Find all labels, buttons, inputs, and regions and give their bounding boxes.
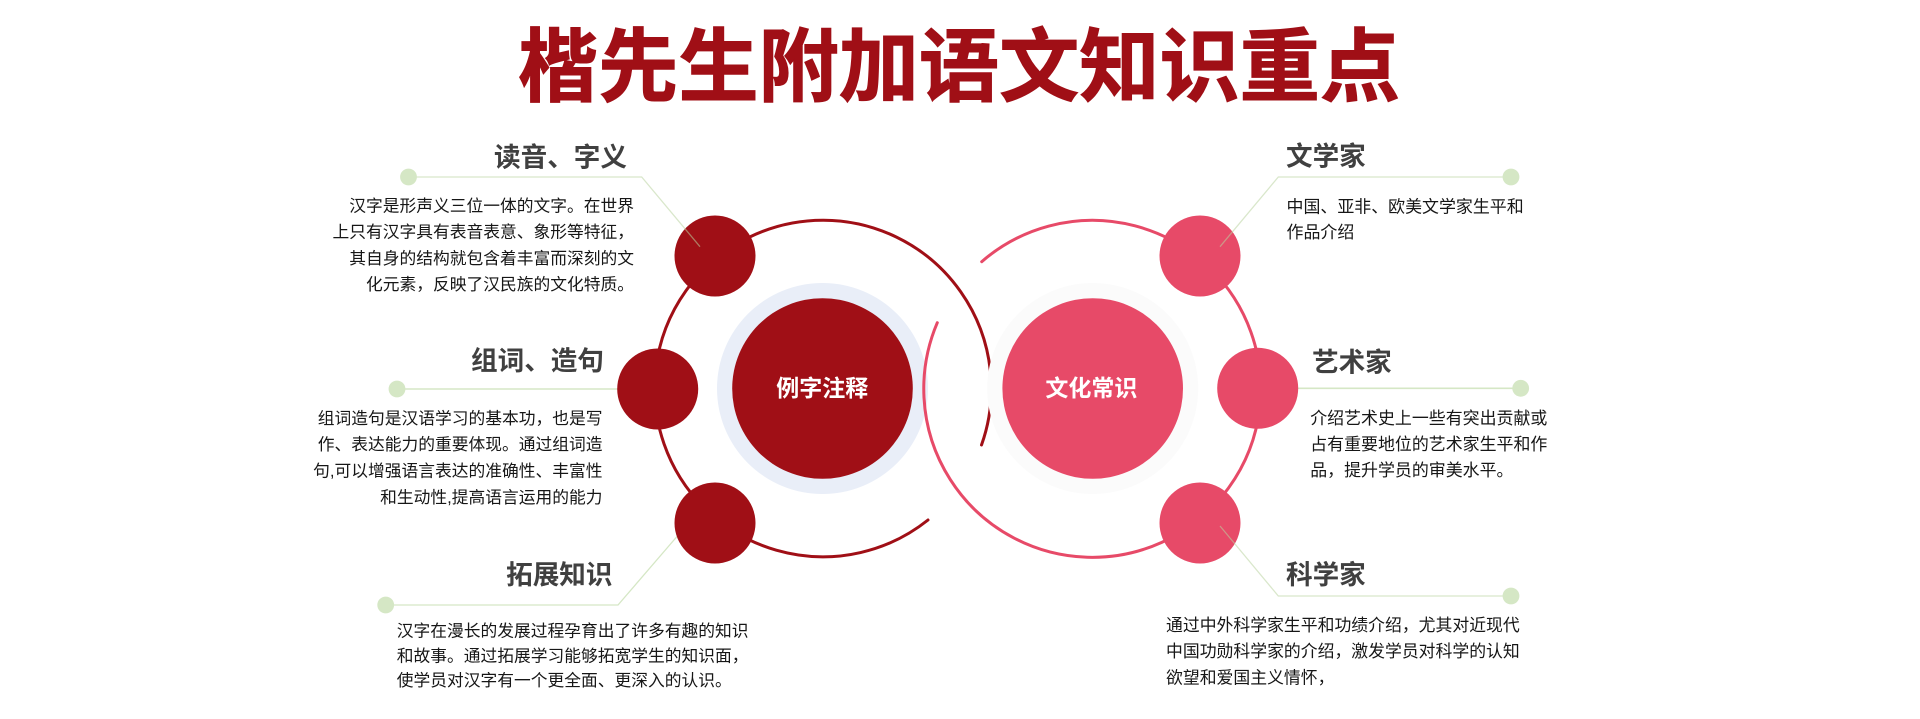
diagram: right ring group: [924, 216, 1521, 564]
text: 组词、造句: 和生动性,提高语言运用的能力: [380, 488, 602, 507]
text: 拓展知识: [397, 622, 748, 690]
text: 文学家: [1286, 198, 1524, 242]
text: 科学家: [1166, 616, 1520, 688]
text: 科学家: 欲望和爱国主义情怀，: [1166, 668, 1334, 688]
heading: 读音、字义: 读音、字义: [494, 142, 627, 172]
connector: 读音、字义: [408, 177, 700, 247]
text: 科学家: 通过中外科学家生平和功绩介绍，尤其对近现代: [1166, 616, 1520, 635]
arc: right ring: [924, 220, 1261, 557]
text: 文学家: 中国、亚非、欧美文学家生平和: [1286, 198, 1524, 216]
node: 艺术家: [1217, 348, 1298, 429]
dot: 读音、字义: [400, 169, 417, 185]
connector: 科学家: [1220, 526, 1511, 596]
node: 组词、造句: [617, 348, 698, 430]
node: 拓展知识: [674, 482, 756, 564]
arc: left ring: [655, 220, 991, 557]
text: 读音、字义: 上只有汉字具有表音表意、象形等特征，: [332, 222, 634, 242]
text: 组词、造句: 句,可以增强语言表达的准确性、丰富性: [313, 462, 602, 480]
dot: 组词、造句: [389, 381, 405, 397]
text: 艺术家: [1310, 409, 1547, 480]
halo: left centre: [717, 283, 928, 494]
heading: 文学家: 文学家: [1286, 142, 1366, 172]
text: 读音、字义: 其自身的结构就包含着丰富而深刻的文: [349, 249, 634, 268]
dot: 拓展知识: [377, 597, 394, 613]
node: 读音、字义: [674, 216, 756, 296]
heading: 科学家: 科学家: [1286, 560, 1366, 590]
connector: 拓展知识: [386, 533, 680, 605]
text: 组词、造句: [313, 409, 603, 507]
text: 文学家: 作品介绍: [1286, 223, 1354, 242]
node: 文学家: [1160, 216, 1240, 296]
label: 文化常识: 文化常识: [1045, 375, 1137, 401]
text: 组词、造句: 组词造句是汉语学习的基本功，也是写: [318, 409, 602, 428]
heading: 拓展知识: 拓展知识: [506, 560, 612, 590]
connector: 文学家: [1220, 177, 1511, 247]
dot: 艺术家: [1512, 380, 1529, 397]
label: 例字注释: 例字注释: [776, 375, 868, 401]
text: 拓展知识: 和故事。通过拓展学习能够拓宽学生的知识面，: [397, 646, 748, 666]
text: 读音、字义: 汉字是形声义三位一体的文字。在世界: [349, 196, 634, 216]
dot: 科学家: [1503, 588, 1519, 604]
circle: 例字注释: [732, 298, 913, 479]
text: 艺术家: 占有重要地位的艺术家生平和作: [1310, 435, 1547, 454]
title: 楷先生附加语文知识重点: [518, 23, 1400, 112]
heading: 艺术家: 艺术家: [1312, 348, 1392, 378]
text: 读音、字义: [332, 196, 634, 294]
text: 读音、字义: 化元素，反映了汉民族的文化特质。: [366, 275, 634, 294]
circle: 文化常识: [1002, 298, 1183, 479]
text: 组词、造句: 作、表达能力的重要体现。通过组词造: [318, 435, 603, 454]
connector: 组词、造句: [397, 388, 619, 390]
diagram: left ring group: [386, 216, 991, 605]
dot: 文学家: [1503, 169, 1519, 185]
text: 艺术家: 介绍艺术史上一些有突出贡献或: [1310, 409, 1547, 428]
text: 拓展知识: 使学员对汉字有一个更全面、更深入的认识。: [397, 670, 732, 690]
text: 拓展知识: 汉字在漫长的发展过程孕育出了许多有趣的知识: [397, 622, 748, 640]
heading: 组词、造句: 组词、造句: [471, 346, 604, 376]
node: 科学家: [1160, 482, 1240, 564]
text: 艺术家: 品，提升学员的审美水平。: [1310, 461, 1513, 480]
halo: right centre: [987, 283, 1198, 494]
connector: 艺术家: [1298, 387, 1521, 389]
text: 科学家: 中国功勋科学家的介绍，激发学员对科学的认知: [1166, 642, 1520, 661]
